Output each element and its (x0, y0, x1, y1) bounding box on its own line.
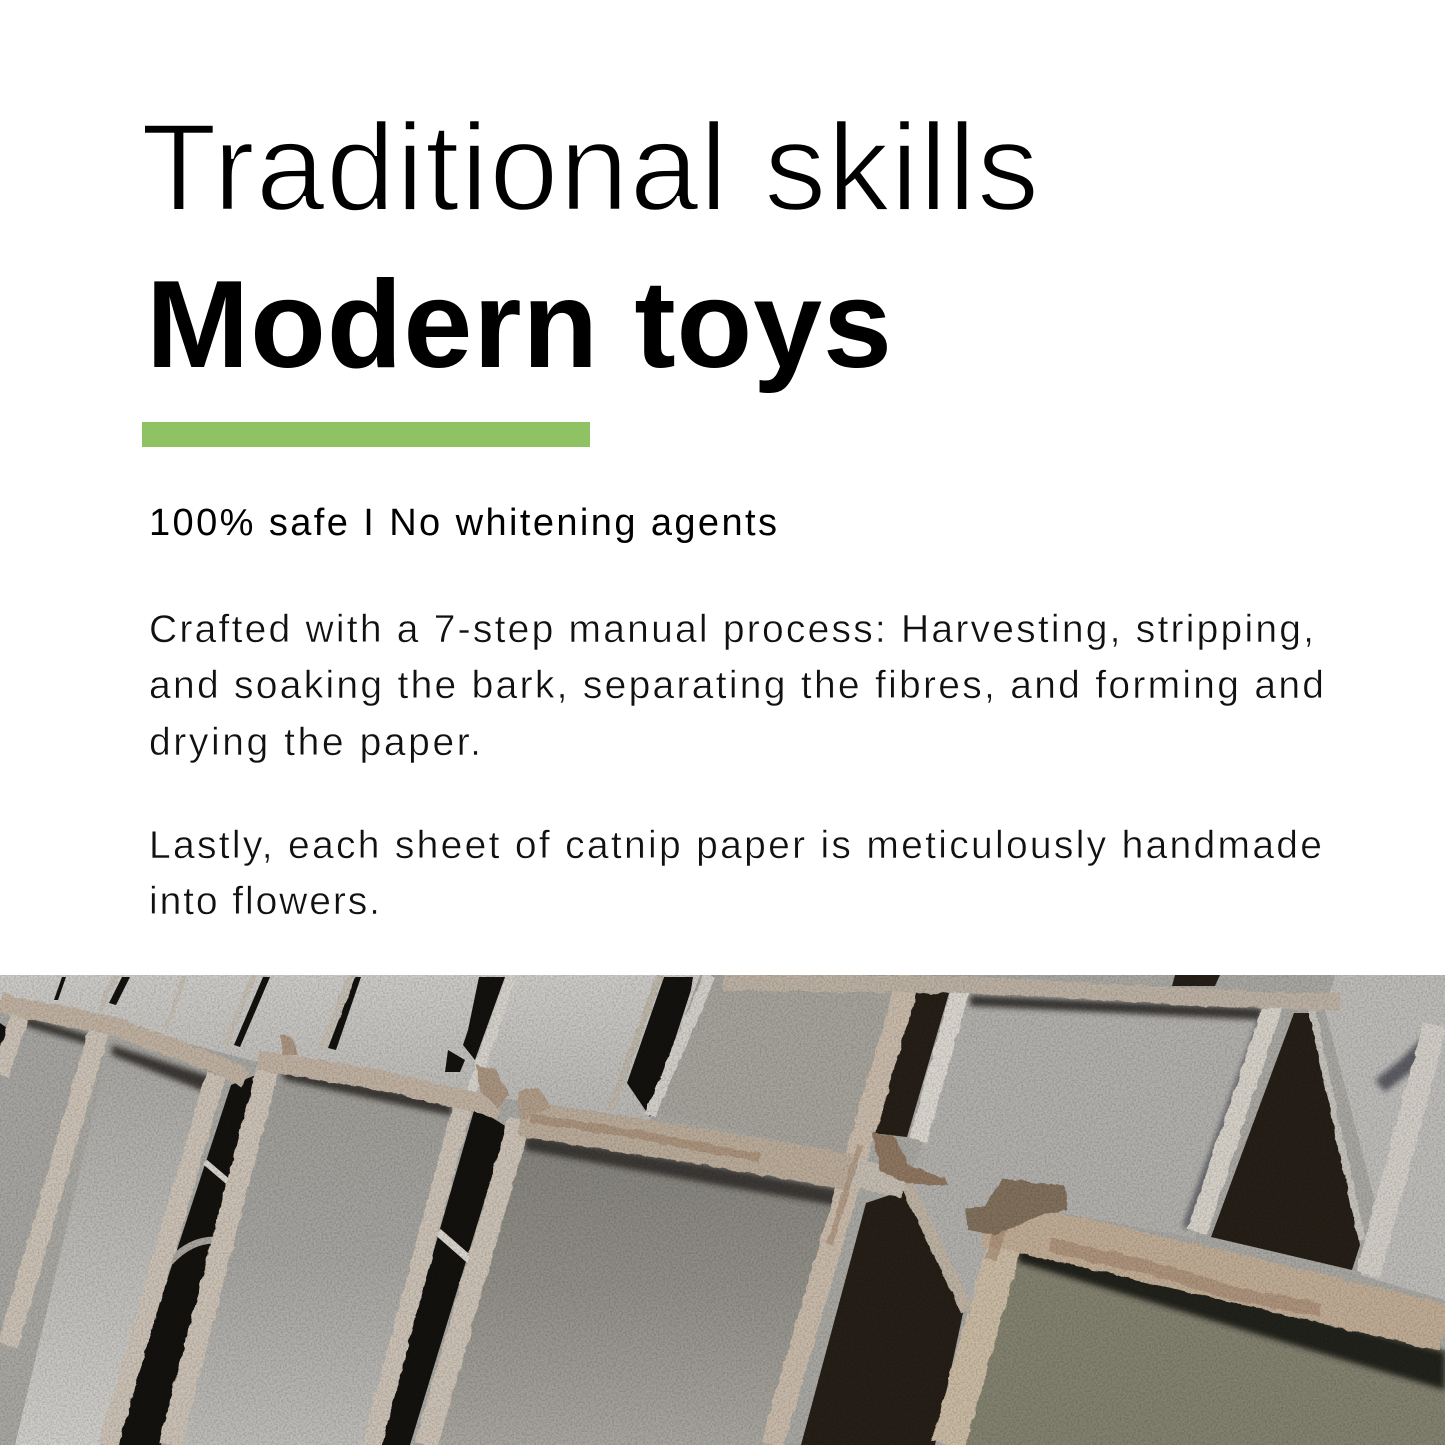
back row of light frames (0, 975, 710, 1120)
light struts across the gaps (170, 1162, 470, 1262)
paragraph: process: and soaking the bark, separating the fibres, and forming and (149, 664, 1324, 707)
paragraph: handmade flowers (149, 824, 1322, 923)
horizontal frame bars (0, 982, 1445, 1328)
frame bars (0, 975, 1445, 1445)
paragraph: process: Crafted with a 7-step manual process: Harvesting, stripping, (149, 608, 1314, 651)
paragraph: process (149, 608, 1324, 764)
knots at the bar joints (280, 1035, 1068, 1235)
shadows under frame bars (25, 995, 1445, 1390)
vertical frame bars (0, 975, 1435, 1445)
photo: paper drying frames (0, 975, 1445, 1445)
paragraph: handmade flowers: into flowers. (149, 880, 380, 923)
paper grain overlay (0, 975, 1445, 1445)
paragraph: handmade flowers: Lastly, each sheet of catnip paper is meticulously handmade (149, 824, 1322, 867)
rust patches (530, 1118, 1320, 1310)
paragraph: process: drying the paper. (149, 721, 481, 764)
dark gaps between frames (0, 977, 693, 1445)
green accent bar (142, 422, 590, 447)
title: Traditional skills: Traditional skills (141, 99, 1039, 237)
subheading: 100% safe I No whitening agents (149, 502, 777, 544)
title: Modern toys: Modern toys (146, 256, 892, 394)
